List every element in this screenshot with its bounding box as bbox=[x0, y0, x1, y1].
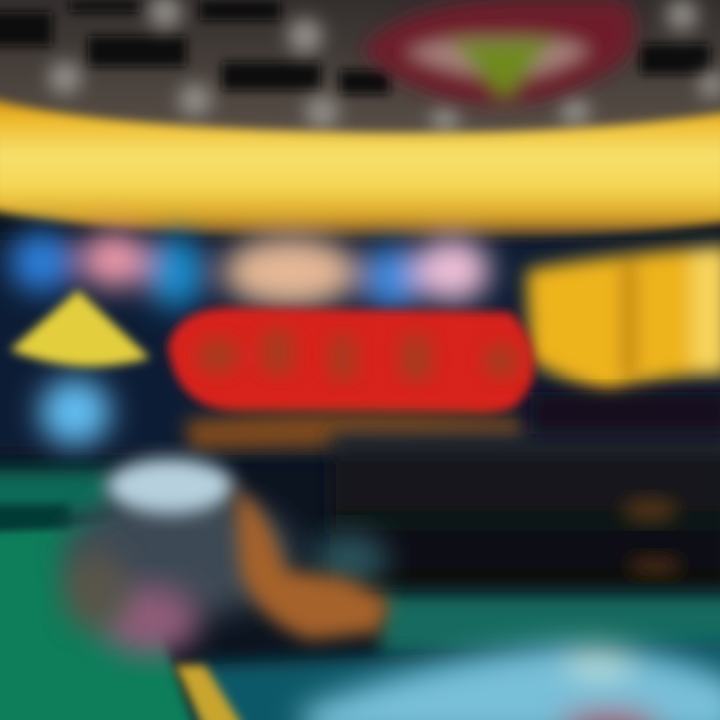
yellow curved band bbox=[0, 98, 720, 243]
dark right counter bbox=[330, 392, 720, 590]
ceiling lights bbox=[48, 0, 720, 134]
dark wall behind signs bbox=[0, 240, 720, 455]
yellow right blocks bbox=[526, 245, 720, 395]
green table bbox=[0, 470, 720, 720]
yellow table line bbox=[175, 665, 245, 720]
playing cards and chips bbox=[63, 458, 390, 655]
light blue table reflection bbox=[300, 645, 720, 720]
yellow triangle sign bbox=[10, 290, 150, 366]
blue and pink signs bbox=[10, 232, 490, 446]
ceiling dark panels bbox=[0, 0, 710, 94]
ceiling bbox=[0, 0, 720, 140]
red casino sign bbox=[168, 308, 534, 450]
ceiling emblem bbox=[362, 0, 635, 105]
